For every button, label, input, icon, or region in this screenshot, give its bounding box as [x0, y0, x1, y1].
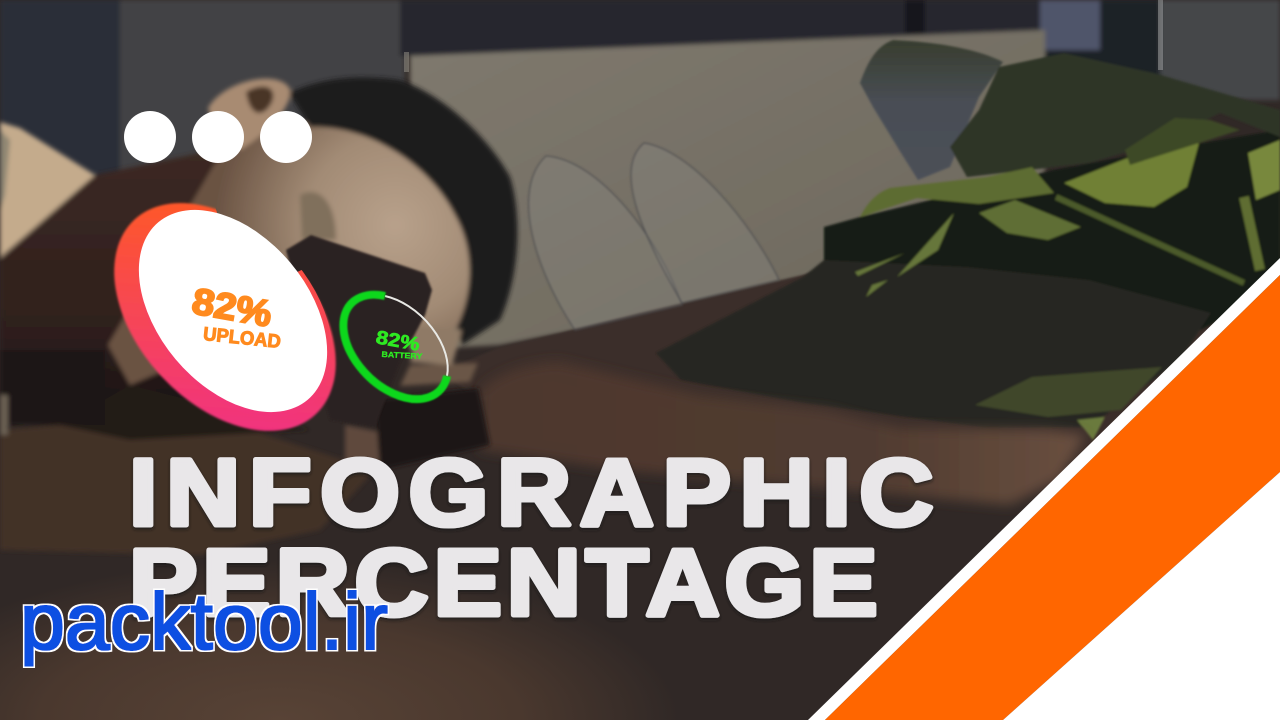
- watermark: packtool.ir: [20, 577, 388, 666]
- hand: [0, 390, 375, 555]
- battery value: 82%: [374, 327, 421, 356]
- upload value: 82%: [189, 280, 275, 335]
- title line 2: PERCENTAGE: [129, 529, 882, 635]
- three white dots: [124, 111, 312, 163]
- progress ring: [112, 201, 338, 433]
- battery label: BATTERY: [381, 350, 423, 361]
- neck and face: [108, 122, 470, 385]
- shoulder and left arm: [0, 130, 300, 420]
- orange band: [825, 275, 1280, 720]
- title: [129, 439, 942, 635]
- battery percentage ring: [343, 295, 448, 399]
- white disc: [101, 174, 365, 448]
- diagonal corner graphic: [808, 258, 1280, 720]
- table: [440, 260, 1280, 470]
- white corner: [1003, 472, 1280, 720]
- ear: [208, 79, 291, 150]
- upload percentage disc: [112, 201, 338, 433]
- green progress arc: [343, 295, 447, 399]
- upload label: UPLOAD: [202, 324, 282, 353]
- remaining track: [385, 296, 448, 376]
- chairs: [529, 143, 779, 330]
- phone: [286, 235, 432, 427]
- hair: [289, 77, 517, 345]
- foliage: [656, 40, 1280, 440]
- white strip: [808, 258, 1280, 720]
- forearm: [480, 362, 1085, 505]
- title line 1: INFOGRAPHIC: [129, 439, 942, 545]
- eye fold: [300, 192, 336, 240]
- floor: [0, 540, 1000, 720]
